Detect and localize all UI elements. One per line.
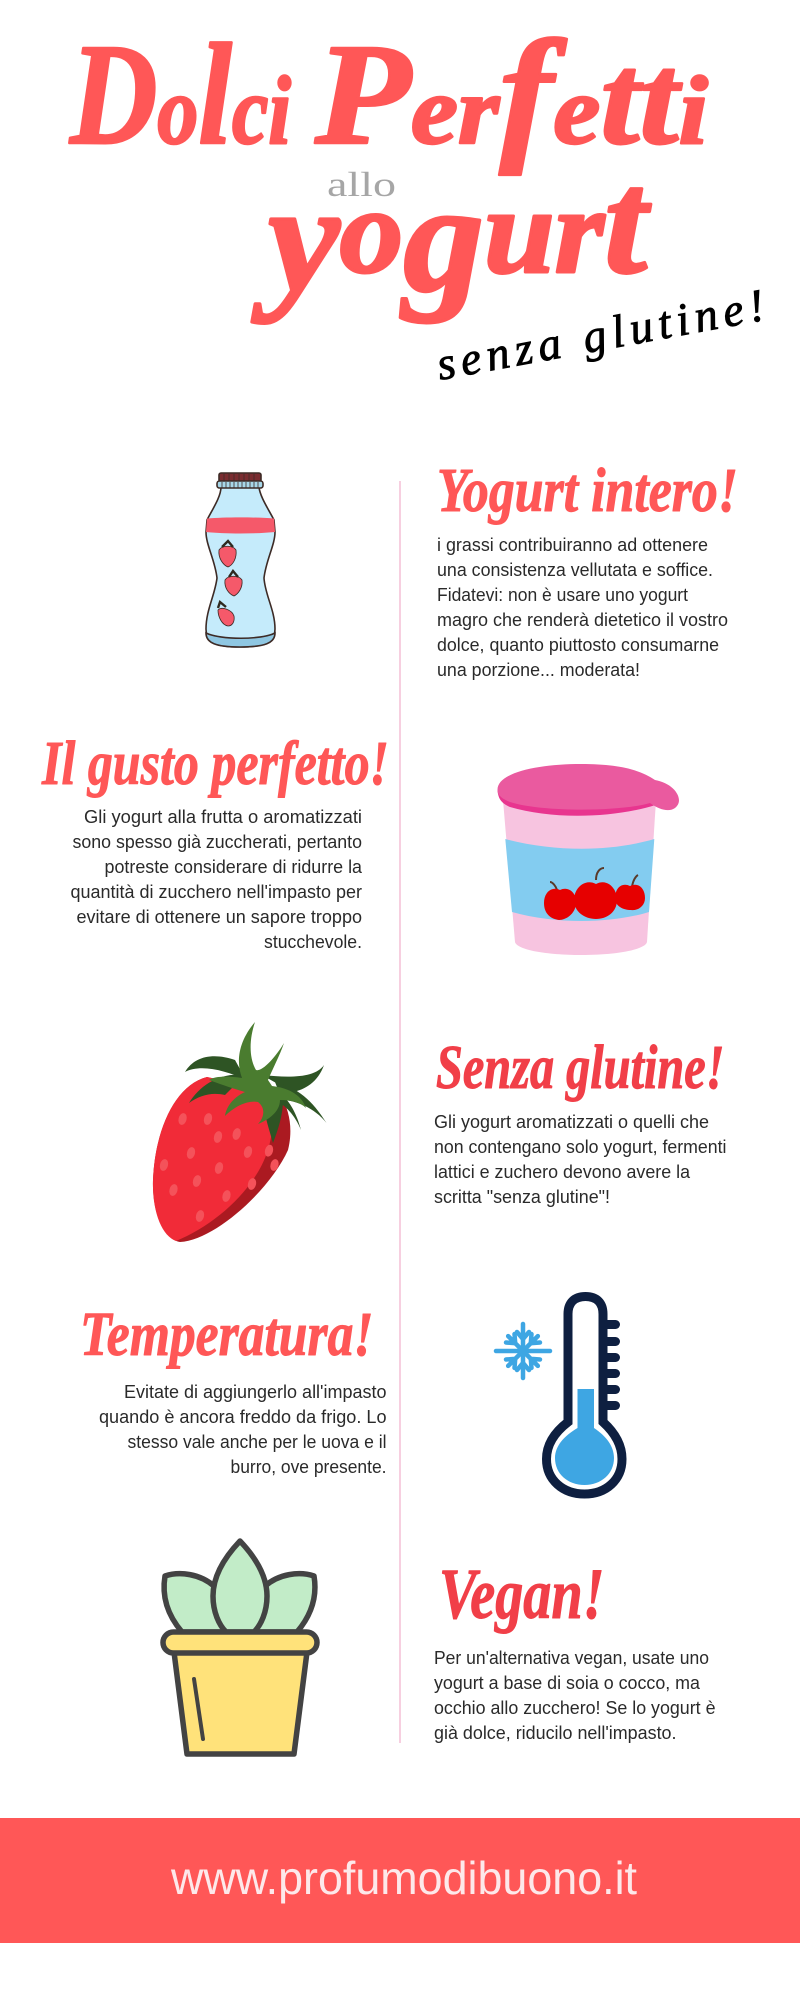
icon: strawberry: [153, 1022, 326, 1242]
central divider line: [399, 481, 401, 1743]
text block: Temperatura: stesso vale anche per le uova e il: [128, 1432, 386, 1452]
subtitle: senza glutine: senza glutine!: [433, 279, 768, 390]
text block: Temperatura: [99, 1382, 386, 1477]
text block: Il gusto perfetto: [70, 807, 363, 952]
text block: Senza glutine: Gli yogurt aromatizzati o quelli che: [434, 1112, 709, 1132]
text block: Yogurt intero: dolce, quanto piuttosto consumarne: [437, 635, 719, 655]
text block: Vegan: già dolce, riducilo nell'impasto.: [434, 1723, 676, 1743]
icon: thermometer: [546, 1296, 622, 1494]
text block: Senza glutine: non contengano solo yogurt, fermenti: [434, 1137, 726, 1157]
text block: Vegan: Per un'alternativa vegan, usate uno: [434, 1648, 709, 1668]
text block: Senza glutine: lattici e zuchero devono avere la: [434, 1162, 691, 1182]
heading: Il gusto perfetto: Il gusto perfetto!: [41, 730, 389, 798]
text block: Senza glutine: scritta "senza glutine"!: [434, 1187, 610, 1207]
text block: Il gusto perfetto: sono spesso già zuccherati, pertanto: [72, 832, 362, 852]
title: Dolci Perfetti: Perfetti: [314, 10, 708, 176]
title connector: allo: allo: [327, 165, 396, 204]
title: yogurt: ur: [484, 164, 606, 299]
text block: Vegan: [434, 1648, 716, 1743]
footer website url: www.profumodibuono.it: [170, 1852, 637, 1904]
title: yogurt: g: [400, 152, 484, 324]
title: yogurt: o: [340, 164, 403, 299]
heading: Yogurt intero: Yogurt intero!: [437, 457, 738, 525]
text block: Vegan: occhio allo zucchero! Se lo yogurt è: [434, 1698, 716, 1718]
text block: Il gusto perfetto: quantità di zucchero nell'impasto per: [70, 882, 362, 902]
text block: Yogurt intero: magro che renderà dietetico il vostro: [437, 610, 728, 630]
text block: Senza glutine: [434, 1112, 726, 1207]
text block: Temperatura: quando è ancora freddo da frigo. Lo: [99, 1407, 386, 1427]
heading: Senza glutine: Senza glutine!: [436, 1034, 724, 1102]
footer banner: [0, 1818, 800, 1943]
icon: potted plant: [163, 1541, 317, 1754]
text block: Il gusto perfetto: potreste considerare di ridurre la: [104, 857, 363, 877]
text block: Yogurt intero: [437, 535, 728, 680]
title: yogurt: t: [604, 141, 651, 305]
text block: Temperatura: Evitate di aggiungerlo all'impasto: [124, 1382, 386, 1402]
text block: Yogurt intero: una porzione... moderata!: [437, 660, 640, 680]
text block: Il gusto perfetto: stucchevole.: [264, 932, 362, 952]
icon: yogurt cup with cherries: [497, 764, 679, 955]
text block: Il gusto perfetto: Gli yogurt alla frutta o aromatizzati: [84, 807, 362, 827]
text block: Yogurt intero: Fidatevi: non è usare uno yogurt: [437, 585, 688, 605]
text block: Il gusto perfetto: evitare di ottenere un sapore troppo: [76, 907, 362, 927]
title: Dolci Perfetti: [68, 10, 708, 176]
title: yogurt: y: [251, 152, 341, 324]
text block: Vegan: yogurt a base di soia o cocco, ma: [434, 1673, 701, 1693]
heading: Vegan: Vegan!: [439, 1554, 604, 1634]
title: Dolci Perfetti: Dolci: [68, 15, 291, 175]
heading: Temperatura: Temperatura!: [80, 1301, 374, 1369]
icon: snowflake: [496, 1324, 550, 1378]
text block: Yogurt intero: i grassi contribuiranno ad ottenere: [437, 535, 708, 555]
text block: Temperatura: burro, ove presente.: [230, 1457, 386, 1477]
text block: Yogurt intero: una consistenza vellutata e soffice.: [437, 560, 713, 580]
icon: yogurt bottle: [206, 473, 275, 647]
